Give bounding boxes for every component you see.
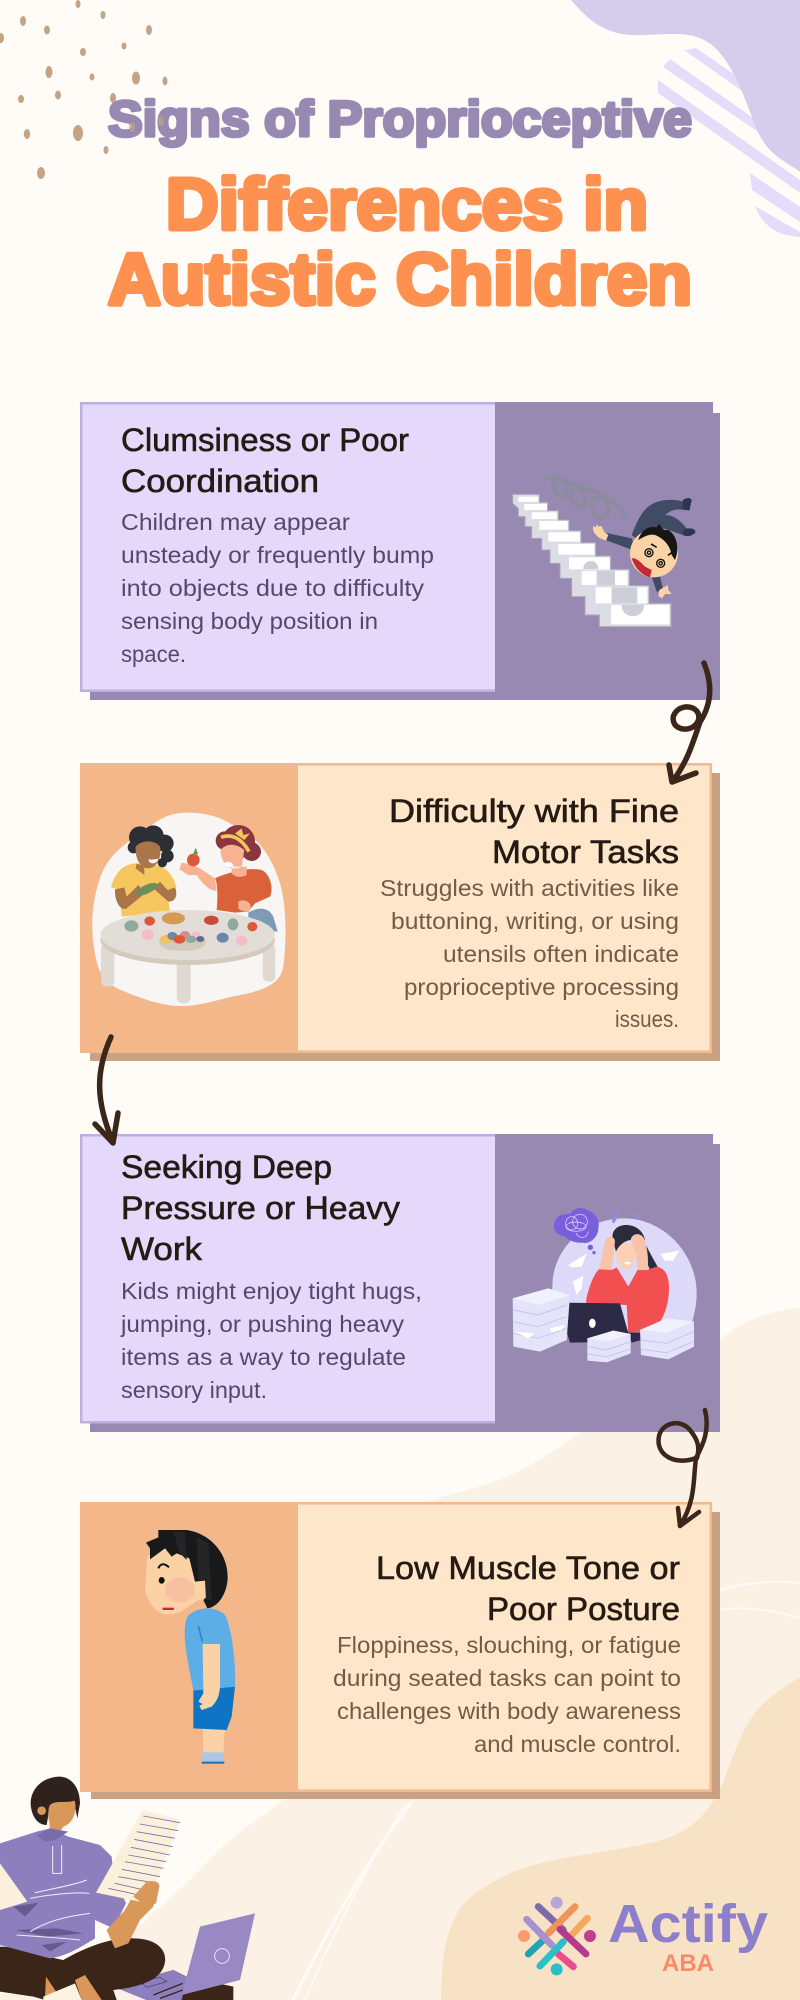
arrow: card 2 to card 3: [95, 1037, 118, 1143]
orange image panel: [80, 1502, 298, 1792]
body text: [380, 875, 679, 1032]
heading: Work: [121, 1231, 203, 1267]
body text: items as a way to regulate: [121, 1344, 406, 1370]
body text: sensing body position in: [121, 608, 378, 634]
body text: challenges with body awareness: [337, 1698, 681, 1724]
body text: [333, 1632, 681, 1757]
title line 2: Differences in: [166, 165, 648, 245]
body text: buttoning, writing, or using: [391, 908, 679, 934]
heading: Difficulty with Fine: [389, 793, 679, 829]
body text: jumping, or pushing heavy: [120, 1311, 405, 1337]
illustration: man reading papers with laptop: [0, 1777, 255, 2000]
decorative stripes top right: [658, 48, 800, 237]
body text: Struggles with activities like: [380, 875, 679, 901]
body text: [121, 509, 434, 667]
top right lavender blob: [571, 0, 800, 172]
heading: [121, 422, 409, 499]
title line 1: Signs of Proprioceptive: [108, 91, 692, 147]
heading: Coordination: [121, 463, 319, 499]
heading: Seeking Deep: [121, 1149, 332, 1185]
logo subtext: ABA: [662, 1950, 714, 1977]
logo wordmark: Actify: [608, 1894, 768, 1954]
icon: man falling down stairs: [513, 476, 695, 627]
body text: Floppiness, slouching, or fatigue: [337, 1632, 681, 1658]
text panel: [80, 402, 495, 692]
body text: proprioceptive processing: [404, 974, 679, 1000]
panel: low muscle tone or poor posture: [80, 1502, 720, 1799]
card shadow: [90, 773, 720, 1061]
arrow: card 1 to card 2: [669, 663, 710, 782]
icon: slouching boy: [145, 1530, 235, 1764]
icon: two children at a table: [92, 813, 286, 1006]
body text: into objects due to difficulty: [121, 575, 425, 601]
body text: during seated tasks can point to: [333, 1665, 681, 1691]
panel: clumsiness or poor coordination: [80, 402, 720, 700]
panel: difficulty with fine motor tasks: [80, 763, 720, 1061]
body text: unsteady or frequently bump: [121, 542, 434, 568]
heading: Pressure or Heavy: [121, 1190, 400, 1226]
card shadow and purple panel: [90, 1134, 720, 1432]
decorative dots: [0, 0, 168, 179]
body text: utensils often indicate: [443, 941, 679, 967]
text panel: [80, 1134, 495, 1424]
title line 3: Autistic Children: [108, 240, 692, 320]
heading: [121, 1149, 400, 1267]
heading: [376, 1550, 680, 1627]
icon: stressed woman with paper stacks: [513, 1205, 697, 1362]
heading: Low Muscle Tone or: [376, 1550, 680, 1586]
heading: Clumsiness or Poor: [121, 422, 409, 458]
body text: sensory input.: [121, 1377, 267, 1403]
body text: issues.: [615, 1006, 679, 1032]
panel: seeking deep pressure or heavy work: [80, 1134, 720, 1432]
body text: Children may appear: [121, 509, 350, 535]
heading: Poor Posture: [487, 1591, 680, 1627]
body text: space.: [121, 641, 186, 667]
card shadow: [91, 1512, 720, 1799]
body text: [120, 1278, 422, 1403]
title: [108, 91, 692, 320]
text panel: [298, 763, 712, 1053]
heading: Motor Tasks: [492, 834, 679, 870]
heading: [389, 793, 679, 870]
logo: Actify ABA: [518, 1894, 768, 1977]
card shadow and purple panel: [90, 402, 720, 700]
body text: and muscle control.: [474, 1731, 681, 1757]
body text: Kids might enjoy tight hugs,: [121, 1278, 422, 1304]
text panel: [298, 1502, 712, 1792]
arrow: card 3 to card 4: [658, 1410, 707, 1526]
icon: logo woven mark: [518, 1897, 596, 1975]
orange image panel: [80, 763, 298, 1053]
